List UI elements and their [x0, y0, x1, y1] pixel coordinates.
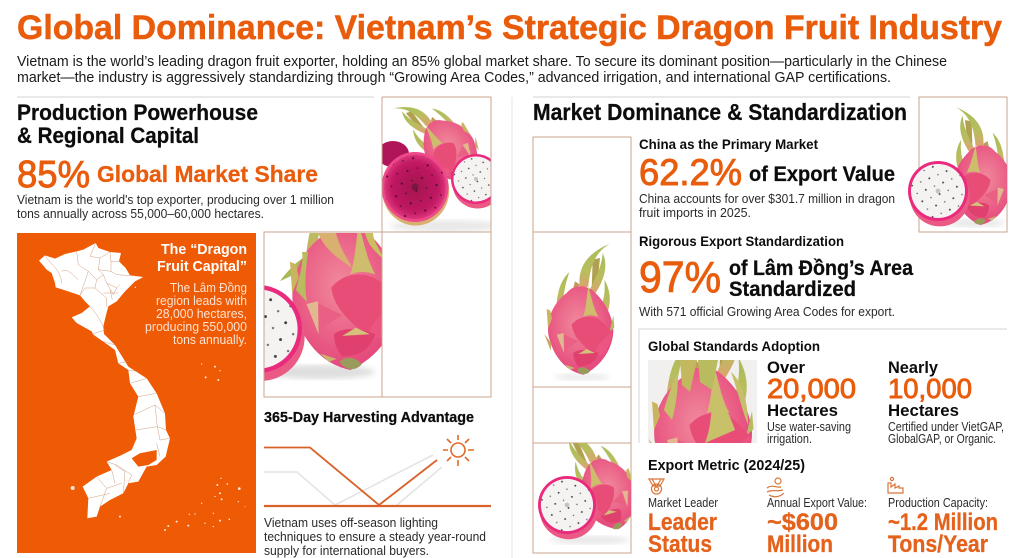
section: China as primary market [639, 136, 895, 220]
icon: medal [649, 479, 664, 494]
metric: production capacity: ~1.2 Million [888, 509, 998, 536]
callout: dragon fruit capital: 28,000 hectares, [156, 306, 247, 321]
text: production description: Vietnam is the world's top exporter, producing over 1 million [17, 192, 334, 207]
panel: dragon fruit capital map [17, 233, 256, 553]
icon: sun [443, 435, 474, 466]
heading: production powerhouse: & Regional Capital [17, 123, 199, 148]
metric: production capacity: Production Capacity: [888, 495, 988, 510]
panel: export metric [648, 457, 998, 558]
metric: annual export value [767, 495, 867, 558]
image frames: production [264, 97, 491, 397]
map of Vietnam [39, 243, 245, 531]
stat: over 20,000 hectares: irrigation. [767, 431, 812, 446]
stat: nearly 10,000 hectares: Hectares [888, 401, 959, 420]
section: China as primary market: China accounts for over $301.7 million in dragon [639, 191, 895, 206]
panel: global standards adoption [638, 328, 1007, 446]
metric: annual export value: Million [767, 531, 833, 558]
callout: dragon fruit capital: tons annually. [173, 332, 247, 347]
section: China as primary market: China as the Primary Market [639, 136, 818, 152]
stat: nearly 10,000 hectares: Nearly [888, 358, 939, 377]
metric: annual export value: ~$600 [767, 509, 838, 536]
heading: global standards: Global Standards Adoption [648, 338, 820, 354]
image: whole dragon fruit with white half [264, 233, 382, 381]
icon: hand with seed [767, 478, 784, 497]
stat: 85% global market share: Global Market Share [97, 161, 318, 187]
orange panel background [17, 233, 256, 553]
section: China as primary market: of Export Value [749, 163, 895, 186]
stat: 85% global market share [17, 154, 318, 196]
image frame: right top [919, 97, 1007, 232]
heading: export metric: Export Metric (2024/25) [648, 457, 805, 474]
callout: dragon fruit capital: The “Dragon [161, 241, 247, 258]
image: fruit with white half, right [908, 107, 1015, 227]
panel: market dominance [533, 97, 1015, 553]
text: harvesting description: Vietnam uses off-season lighting [264, 515, 438, 530]
stat: over 20,000 hectares: Over [767, 358, 805, 377]
stat: over 20,000 hectares: 20,000 [767, 373, 856, 404]
metric: market leader: Status [648, 531, 712, 558]
image frames: left column [533, 137, 631, 553]
heading: market dominance: Market Dominance & Standardization [533, 99, 907, 125]
stat: 85% global market share: 85% [17, 154, 90, 196]
intro paragraph [17, 53, 947, 86]
section: China as primary market: fruit imports in 2025. [639, 205, 751, 220]
metric: market leader: Leader [648, 509, 717, 536]
stat: nearly 10,000 hectares: GlobalGAP, or Organic. [888, 431, 996, 446]
callout: dragon fruit capital: The Lâm Đồng [170, 280, 247, 295]
text: harvesting description [264, 515, 486, 558]
section: rigorous export standardization: 97% [639, 253, 721, 302]
metric: annual export value: Annual Export Value: [767, 495, 867, 510]
intro paragraph: market—the industry is aggressively standardizing through “Growing Area Codes,” advanced irrigation, and international GAP certifications. [17, 69, 891, 86]
section: rigorous export standardization: Standardized [729, 278, 856, 301]
section: rigorous export standardization: of Lâm Đồng’s Area [729, 257, 913, 280]
stat: over 20,000 hectares: Hectares [767, 401, 838, 420]
image: fruit upright [544, 244, 614, 380]
panel: production powerhouse [17, 79, 502, 397]
stat: nearly 10,000 hectares: 10,000 [888, 373, 972, 404]
image: fruit with white half [538, 443, 631, 545]
chart: year-round supply lines [264, 448, 491, 506]
text: harvesting description: techniques to ensure a steady year-round [264, 529, 486, 544]
callout: dragon fruit capital: region leads with [156, 293, 247, 308]
section: rigorous export standardization [639, 233, 913, 319]
section: rigorous export standardization: With 571 official Growing Area Codes for export. [639, 304, 895, 319]
callout: dragon fruit capital: producing 550,000 [145, 319, 247, 334]
callout: dragon fruit capital: Fruit Capital” [157, 258, 247, 275]
title: Global Dominance: Vietnam’s Strategic Dragon Fruit Industry [17, 9, 1002, 47]
icon: factory [888, 477, 903, 493]
section: China as primary market: 62.2% [639, 152, 742, 193]
panel: 365-day harvesting [264, 409, 491, 558]
metric: market leader [648, 495, 719, 558]
stat: nearly 10,000 hectares [888, 358, 1004, 446]
metric: market leader: Market Leader [648, 495, 719, 510]
text: production description [17, 192, 334, 221]
callout: dragon fruit capital [145, 241, 247, 347]
section: rigorous export standardization: Rigorous Export Standardization [639, 233, 844, 249]
stat: over 20,000 hectares: Use water-saving [767, 419, 851, 434]
text: production description: tons annually across 55,000–60,000 hectares. [17, 206, 264, 221]
intro paragraph: Vietnam is the world’s leading dragon fruit exporter, holding an 85% global market share. To secure its dominant position—particularly in the Chinese [17, 53, 947, 70]
heading: harvesting: 365-Day Harvesting Advantage [264, 409, 474, 426]
stat: over 20,000 hectares [767, 358, 856, 446]
heading: production powerhouse [17, 100, 258, 148]
image: cut dragon fruits [382, 106, 490, 232]
image: dragon fruit close-up [648, 360, 757, 443]
text: harvesting description: supply for international buyers. [264, 543, 429, 558]
heading: production powerhouse: Production Powerhouse [17, 100, 258, 125]
metric: production capacity: Tons/Year [888, 531, 988, 558]
metric: production capacity [888, 495, 998, 558]
